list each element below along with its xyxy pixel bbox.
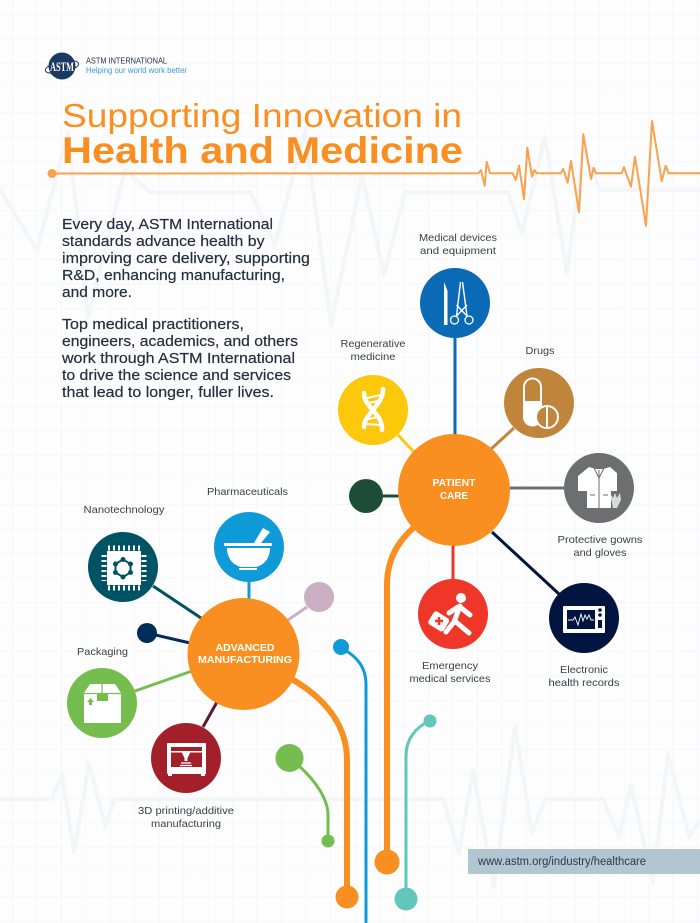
branch: teal line	[394, 714, 436, 910]
label: Protective gowns	[558, 535, 642, 546]
paragraph 2: engineers, academics, and others	[62, 334, 298, 350]
icon: DNA helix	[364, 389, 383, 430]
node: advanced manufacturing hub: ADVANCED	[216, 642, 275, 654]
node: pink dot	[304, 582, 334, 612]
icon: 3D printer	[167, 743, 206, 776]
label	[558, 535, 642, 559]
node: electronic health records	[548, 583, 620, 689]
node: patient care hub: CARE	[440, 490, 468, 502]
node: emergency medical services	[410, 579, 490, 685]
label: 3D printing/additive	[138, 806, 234, 817]
label: Drugs	[526, 346, 554, 357]
node: packaging	[67, 647, 137, 738]
label: Medical devices	[419, 233, 497, 244]
title line 1: Supporting Innovation in	[62, 97, 462, 134]
label	[548, 665, 620, 689]
heartbeat rule under title	[48, 121, 700, 226]
logo name: ASTM INTERNATIONAL	[86, 56, 167, 66]
node: drugs	[504, 346, 574, 438]
paragraph 1: Every day, ASTM International	[62, 217, 273, 233]
paragraph 2: work through ASTM International	[61, 351, 295, 367]
label	[419, 233, 497, 257]
label	[340, 339, 406, 363]
node: 3D printing	[138, 723, 234, 830]
label: Emergency	[422, 661, 479, 672]
logo: ASTM International	[44, 52, 187, 80]
node: patient care hub	[398, 434, 510, 546]
website banner: www.astm.org/industry/healthcare	[477, 856, 646, 868]
title line 2: Health and Medicine	[62, 130, 463, 171]
node: navy dot	[137, 623, 157, 643]
paragraph 1: and more.	[62, 285, 132, 301]
label: Pharmaceuticals	[207, 487, 288, 498]
paragraph 1: standards advance health by	[62, 234, 265, 250]
paragraph 2	[61, 317, 298, 401]
label: health records	[548, 678, 620, 689]
node: advanced manufacturing hub: MANUFACTURING	[198, 654, 292, 666]
branch: blue line	[333, 639, 366, 923]
intro text	[61, 217, 310, 401]
logo tagline: Helping our world work better	[86, 65, 187, 75]
title	[62, 97, 463, 171]
icon: lab coat and gloves	[578, 467, 621, 508]
icon: person carrying medical case	[427, 593, 470, 633]
label	[410, 661, 490, 685]
icon: ASTM globe: ASTM	[50, 59, 74, 74]
connectors: patient care	[383, 338, 565, 594]
node: pharmaceuticals	[207, 487, 288, 582]
label: Nanotechnology	[84, 505, 165, 516]
node: nanotechnology	[84, 505, 165, 602]
label: Regenerative	[340, 339, 406, 350]
label: manufacturing	[151, 819, 221, 830]
paragraph 1	[62, 217, 310, 301]
icon: ASTM globe	[44, 52, 80, 80]
label: and equipment	[420, 246, 496, 257]
node: advanced manufacturing hub	[188, 598, 300, 710]
label	[138, 806, 234, 830]
label: medicine	[350, 352, 396, 363]
paragraph 2: Top medical practitioners,	[62, 317, 244, 333]
website banner	[468, 849, 700, 874]
label: medical services	[410, 674, 490, 685]
node: protective gowns and gloves	[558, 453, 642, 559]
node: dark green dot	[349, 479, 383, 513]
paragraph 1: improving care delivery, supporting	[62, 251, 310, 267]
icon: patient monitor	[563, 606, 605, 633]
paragraph 2: to drive the science and services	[62, 368, 291, 384]
node: medical devices and equipment	[419, 233, 497, 338]
icon: scalpel and forceps	[444, 282, 473, 325]
connectors: advanced manufacturing	[135, 582, 307, 727]
label: Packaging	[77, 647, 128, 658]
branch: orange line from patient care	[374, 525, 417, 874]
icon: chip with molecule	[104, 548, 144, 588]
icon: capsule and tablet	[523, 378, 558, 428]
icon: mortar and pestle	[224, 528, 272, 570]
node: patient care hub: PATIENT	[432, 477, 476, 489]
label: Electronic	[560, 665, 608, 676]
node: regenerative medicine	[338, 339, 408, 445]
paragraph 2: that lead to longer, fuller lives.	[62, 385, 274, 401]
branch: orange line from advanced manufacturing	[290, 678, 358, 908]
paragraph 1: R&D, enhancing manufacturing,	[62, 268, 285, 284]
label: and gloves	[574, 548, 626, 559]
branch: green line	[276, 744, 334, 848]
icon: cardboard box	[84, 684, 121, 723]
